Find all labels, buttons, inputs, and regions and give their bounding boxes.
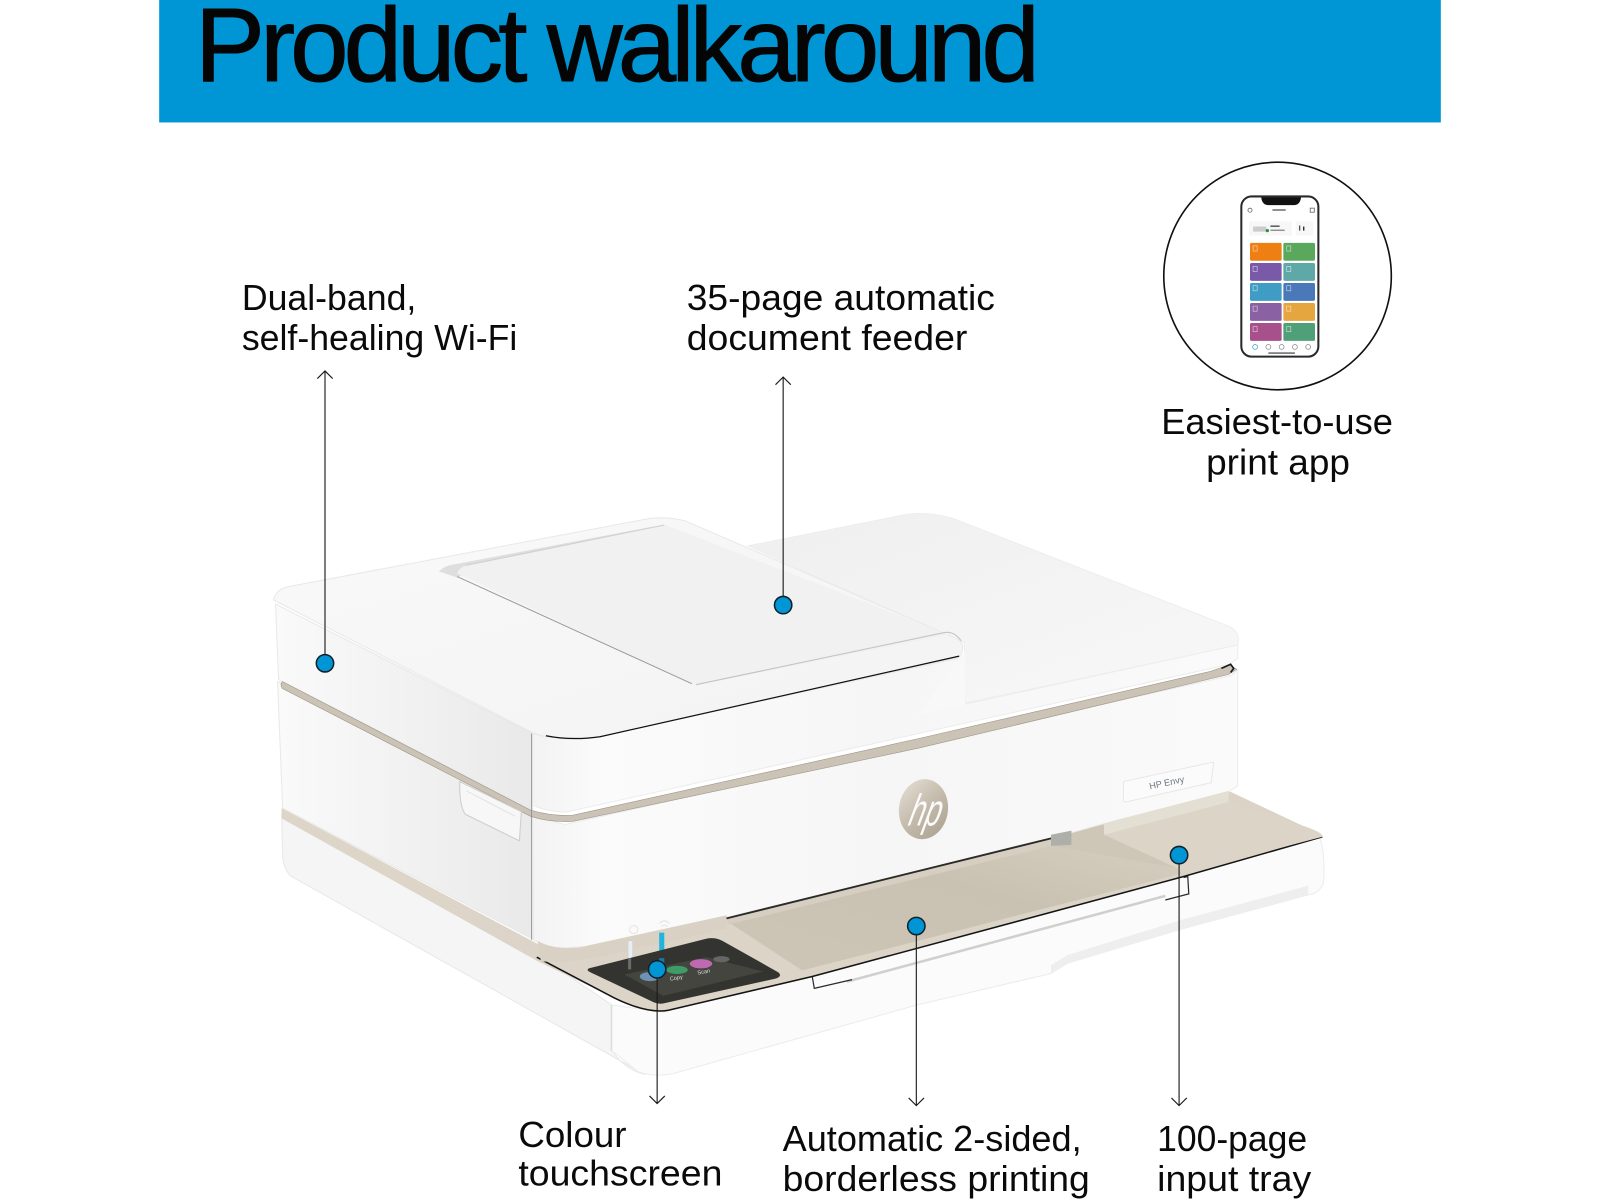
printing label: borderless printing (783, 1158, 1090, 1199)
output tray surface (731, 846, 1182, 970)
beige collar by panel (538, 915, 727, 962)
touchscreen label: Colour (518, 1114, 627, 1155)
right beige collar (1104, 791, 1229, 835)
base unit front face (612, 837, 1324, 1075)
platform dark edge (537, 837, 1322, 1011)
tray label: 100-page (1157, 1118, 1307, 1159)
output tray extender (811, 877, 1189, 988)
output slot (727, 838, 1051, 918)
Wi-Fi label: self-healing Wi-Fi (242, 317, 517, 358)
app icons: Copy (669, 974, 684, 983)
Wi-Fi label: Dual-band, (242, 277, 416, 318)
beige platform (282, 791, 1322, 1011)
side latch (460, 782, 521, 841)
touchscreen panel (588, 938, 780, 1004)
hp logo: hp (905, 785, 949, 835)
feeder front edge (546, 656, 959, 739)
phone header (1272, 209, 1286, 211)
document feeder top (273, 518, 963, 739)
side of upper body (278, 682, 534, 940)
app icons (640, 956, 730, 983)
product badge (1123, 762, 1214, 802)
base unit left face (282, 814, 645, 1074)
app label: print app (1206, 441, 1350, 482)
callout: Wi-Fi (242, 277, 517, 672)
feeder right side (918, 645, 965, 714)
phone (1241, 196, 1318, 357)
printer illustration (273, 513, 1324, 1075)
metal tray guide (1051, 831, 1071, 846)
printing label: Automatic 2-sided, (783, 1118, 1082, 1159)
app circle (1164, 162, 1391, 390)
phone nav bar (1253, 344, 1311, 349)
body corner line (531, 734, 533, 940)
product badge: HP Envy (1148, 774, 1186, 791)
callout: touchscreen (518, 961, 722, 1194)
seam end shadow (1221, 664, 1234, 672)
touchscreen label: touchscreen (518, 1153, 722, 1194)
feeder label: document feeder (687, 317, 967, 358)
feeder label: 35-page automatic (687, 277, 995, 318)
feeder input tray (457, 524, 949, 684)
base shadow strip (1051, 886, 1308, 973)
app label: Easiest-to-use (1161, 401, 1393, 442)
feeder tray shadow line (457, 577, 692, 684)
phone status card (1249, 221, 1313, 236)
scanner side (276, 604, 533, 810)
feeder tray back line (466, 525, 664, 565)
tray label: input tray (1157, 1158, 1312, 1199)
callout: document feeder (687, 277, 995, 614)
main body front (533, 669, 1238, 948)
app tiles (1250, 243, 1315, 341)
app icons: Scan (697, 968, 711, 977)
callout: 2-sided printing (783, 917, 1090, 1199)
status lights (628, 921, 669, 958)
app callout (1161, 162, 1393, 482)
base corner line (610, 1005, 612, 1051)
tile glyph marks (1253, 246, 1291, 332)
beige strip under output slot (727, 839, 1051, 924)
wedge beside output tray (1051, 824, 1178, 868)
title banner (159, 0, 1441, 122)
scanner lid front band (533, 645, 1238, 812)
hp logo (895, 776, 952, 842)
flatbed lid (748, 513, 1238, 703)
beige seam band (281, 665, 1237, 822)
callout: input tray (1157, 846, 1312, 1199)
feeder input tray groove (439, 527, 658, 578)
feeder tray lower line (696, 632, 961, 685)
paper input tray (1104, 802, 1322, 874)
